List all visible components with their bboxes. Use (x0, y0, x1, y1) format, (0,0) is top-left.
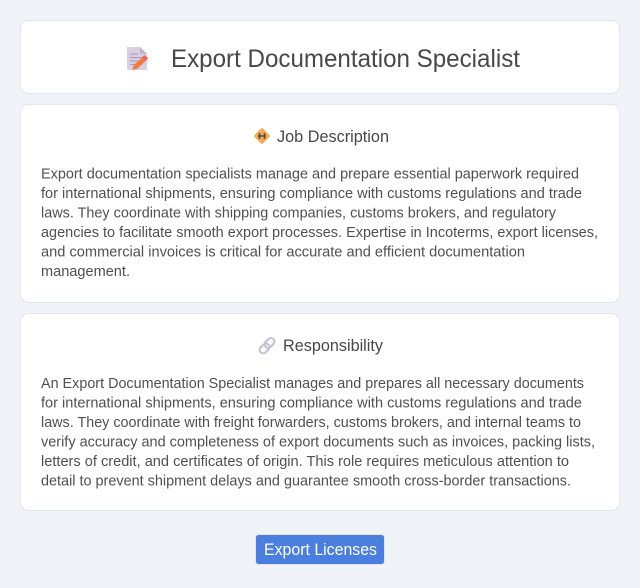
icon: document with pencil (127, 47, 148, 70)
text: job description body: Export documentation specialists manage and prepare essential paperwork required (41, 166, 579, 182)
heading: responsibility: Responsibility (283, 336, 383, 355)
panel: job description (20, 104, 620, 302)
text: responsibility body: laws. They coordinate with freight forwarders, customs brokers, and internal teams to (41, 414, 581, 431)
text: responsibility body: verify accuracy and completeness of export documents such as invoices, packing lists, (41, 434, 595, 450)
text: responsibility body: An Export Documentation Specialist manages and prepares all necessary documents (41, 375, 584, 392)
icon: job description diamond (254, 128, 270, 144)
text: job description body (41, 166, 598, 280)
panel: title (20, 20, 620, 94)
button: export licenses: Export Licenses (264, 540, 377, 559)
panel: responsibility (20, 314, 620, 510)
text: job description body: for international shipments, ensuring compliance with customs regulations and trade (41, 185, 582, 202)
text: responsibility body: letters of credit, and certificates of origin. This role requires meticulous attention to (41, 453, 569, 470)
text: responsibility body: detail to prevent shipment delays and guarantee smooth cross-border transactions. (41, 472, 571, 490)
text: job description body: laws. They coordinate with shipping companies, customs brokers, and regulatory (41, 204, 556, 222)
text: job description body: agencies to facilitate smooth export processes. Expertise in Incoterms, export licenses, (41, 224, 598, 241)
text: responsibility body: for international shipments, ensuring compliance with customs regulations and trade (41, 394, 582, 412)
button: export licenses (256, 534, 384, 564)
title text: Export Documentation Specialist (171, 45, 520, 73)
text: job description body: management. (41, 263, 130, 280)
text: job description body: and commercial invoices is critical for accurate and efficient documentation (41, 244, 525, 260)
icon: link (258, 337, 276, 355)
text: responsibility body (41, 375, 595, 490)
heading: job description: Job Description (277, 127, 389, 146)
